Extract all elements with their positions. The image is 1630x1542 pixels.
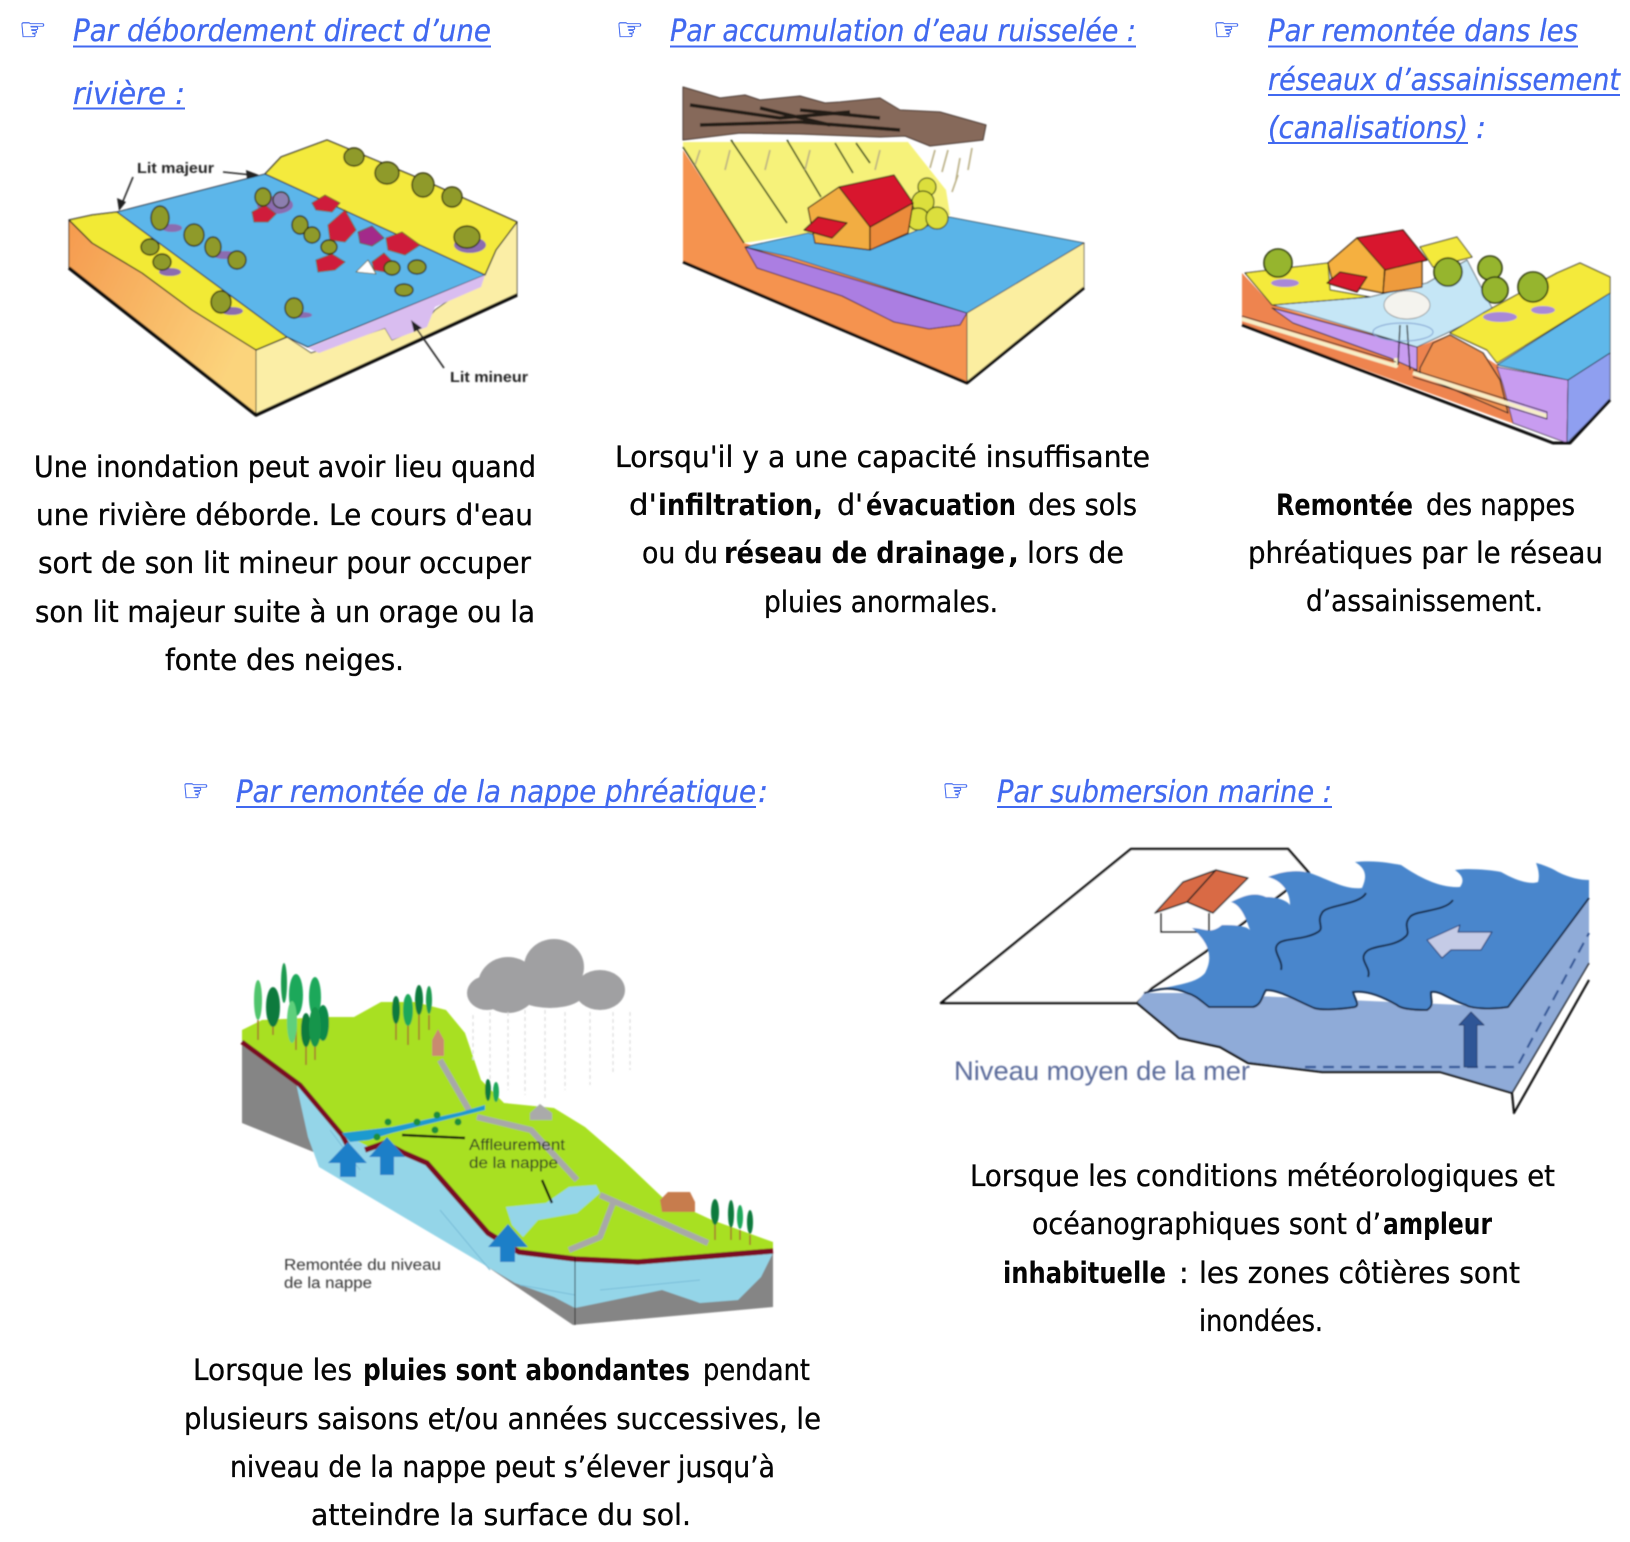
houses [252,195,420,274]
water jet [1384,291,1430,319]
text: runoff description: lors de [1027,536,1124,570]
text: runoff description: infiltration, [658,488,823,522]
text: runoff description: réseau de drainage [724,536,1005,570]
text: marine submersion description: océanographiques sont d’ [1032,1207,1381,1241]
illustration: river overflow block diagram [69,140,528,415]
text: sewer description: Remontée [1276,488,1413,522]
heading: river overflow: Par débordement direct d’une [73,14,491,49]
text: marine submersion description [970,1159,1555,1338]
text: runoff description: ou du [642,536,718,570]
text: runoff description [615,440,1150,619]
heading: marine submersion: ☞ [942,773,970,809]
text: groundwater description: pluies sont abondantes [363,1353,690,1387]
blue arrows [328,1137,528,1262]
waves [1144,861,1589,1010]
text: river overflow description: sort de son lit mineur pour occuper [38,546,531,580]
text: marine submersion description: les zones côtières sont [1199,1256,1520,1290]
roads [440,1060,708,1250]
panel: sewer network backflow [1213,12,1621,618]
house [1155,870,1248,932]
text: groundwater description: pendant [703,1353,810,1387]
heading: groundwater rise: : [758,775,768,810]
heading: river overflow [19,12,491,112]
text: sewer description: des nappes [1426,488,1575,522]
callouts: Affleurement [469,1137,566,1154]
text: marine submersion description: inhabituelle [1003,1256,1166,1290]
trees [254,963,753,1245]
arrow: level rise [1459,1012,1484,1067]
text: river overflow description [34,450,536,677]
text: runoff description: d' [837,488,863,522]
text: sewer description: phréatiques par le réseau [1248,536,1603,570]
red soil line [242,1042,350,1150]
heading: river overflow: ☞ [19,12,47,48]
labels: lit majeur, lit mineur: Lit mineur [450,369,528,386]
text: river overflow description: fonte des neiges. [165,643,404,677]
illustration: runoff accumulation block diagram [683,87,1084,383]
text: sewer description: d’assainissement. [1306,584,1543,618]
heading: groundwater rise: ☞ [182,773,210,809]
dashed mean sea level [1305,933,1589,1067]
text: marine submersion description: inondées. [1199,1304,1323,1338]
house [1327,230,1427,293]
illustration: groundwater rise hillside [242,939,773,1325]
text: river overflow description: une rivière déborde. Le cours d'eau [36,498,533,532]
heading: runoff accumulation: ☞ [616,12,644,48]
heading: sewer network backflow [1213,12,1621,146]
text: river overflow description: son lit majeur suite à un orage ou la [35,595,535,629]
groundwater [296,1083,773,1308]
panel: river overflow [19,12,536,677]
houses [432,1029,695,1212]
panel: groundwater rise [182,773,821,1532]
illustration: sewer backflow block diagram [1242,230,1610,443]
wave crest lines [1276,893,1453,977]
text: groundwater description: atteindre la surface du sol. [311,1498,691,1532]
arrow: wave direction [1427,925,1492,958]
callouts: de la nappe [284,1275,372,1292]
panel: runoff accumulation [615,12,1150,619]
illustration: marine submersion block [941,849,1589,1113]
text: runoff description: des sols [1028,488,1137,522]
tree shadows [159,196,486,318]
tree shadows [1271,279,1555,322]
panel: marine submersion [941,773,1589,1338]
text: marine submersion description: ampleur [1383,1207,1493,1241]
bedrock [242,1040,773,1325]
text: groundwater description: Lorsque les [193,1353,352,1387]
storm cloud [683,87,986,146]
labels: lit majeur, lit mineur: Lit majeur [137,160,214,177]
text: runoff description: évacuation [866,488,1016,522]
heading: sewer network backflow: ☞ [1213,12,1241,48]
lake [506,1185,600,1237]
callouts [284,1135,575,1325]
trees [141,148,480,318]
heading: sewer network backflow: (canalisations) [1268,111,1468,146]
text: runoff description: d' [629,488,657,522]
text: runoff description: pluies anormales. [764,585,998,619]
text: river overflow description: Une inondation peut avoir lieu quand [34,450,536,484]
heading: marine submersion: Par submersion marine : [997,775,1332,810]
land plate [941,849,1309,1003]
raised sea body [1137,898,1589,1093]
callouts: de la nappe [469,1155,558,1172]
rain [695,148,972,192]
tree [907,178,948,230]
grass hillside [242,1002,773,1260]
text: marine submersion description: : [1179,1256,1189,1290]
rain cloud [467,939,625,1013]
text: groundwater description [184,1353,821,1532]
text: runoff description: , [1008,536,1019,570]
text: marine submersion description: Lorsque les conditions météorologiques et [970,1159,1555,1193]
heading: groundwater rise: Par remontée de la nappe phréatique [236,775,756,810]
text: groundwater description: plusieurs saisons et/ou années successives, le [184,1402,821,1436]
text: sewer description [1248,488,1603,618]
labels: lit majeur, lit mineur [117,160,528,386]
heading: sewer network backflow: Par remontée dans les [1268,14,1578,49]
callouts: Remontée du niveau [284,1257,441,1274]
flooded house [804,175,913,250]
heading: river overflow: rivière : [73,77,185,112]
text: runoff description: Lorsqu'il y a une capacité insuffisante [615,440,1150,474]
text: groundwater description: niveau de la nappe peut s’élever jusqu’à [230,1450,775,1484]
trees [1264,249,1548,303]
stream [342,1105,485,1142]
label: mean sea level: Niveau moyen de la mer [954,1056,1250,1086]
heading: runoff accumulation: Par accumulation d’eau ruisselée : [670,14,1136,49]
heading: sewer network backflow: : [1476,111,1486,146]
stream-side shrubs [374,1112,462,1140]
